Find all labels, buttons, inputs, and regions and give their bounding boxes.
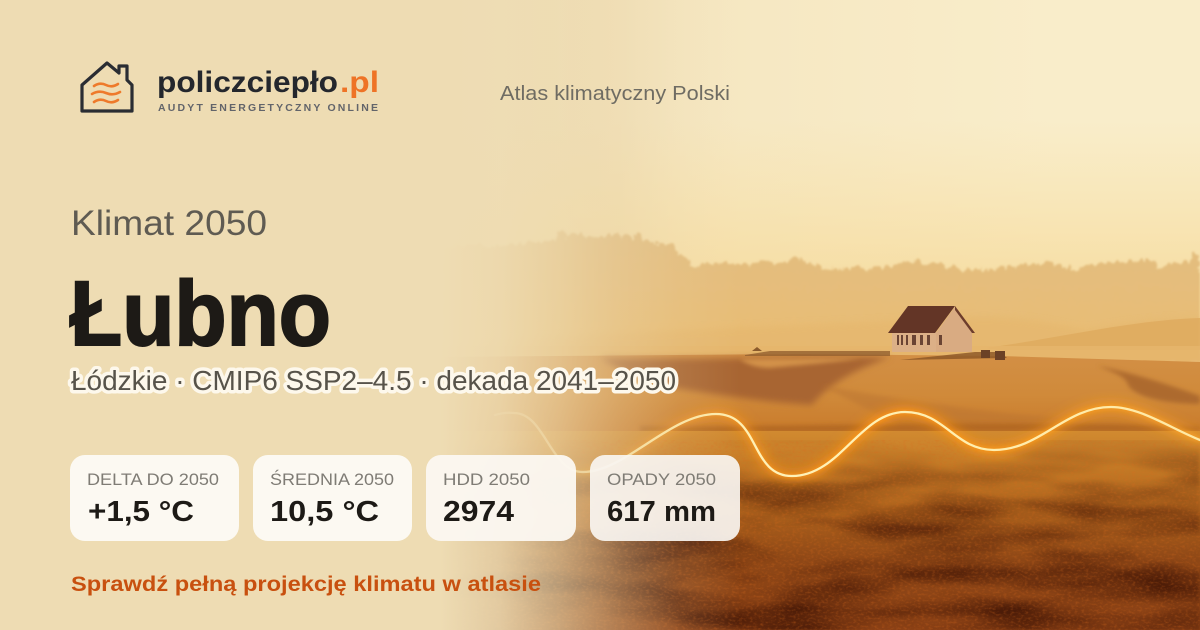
icon: house with heat waves <box>82 63 132 111</box>
stat card: mean <box>253 455 412 541</box>
wheat field <box>440 431 1200 630</box>
glowing climate wave <box>495 407 1200 476</box>
subtitle: Łódzkie · CMIP6 SSP2–4.5 · dekada 2041–2050 <box>71 365 676 396</box>
stat card: precipitation <box>590 455 740 541</box>
stat card: mean: 10,5 °C <box>270 496 379 528</box>
stat card: delta: DELTA DO 2050 <box>87 471 219 489</box>
rolling dune <box>440 354 1200 440</box>
stat card: precipitation: OPADY 2050 <box>607 471 716 489</box>
brand domain: .pl <box>340 66 379 99</box>
subtitle: Łódzkie · CMIP6 SSP2–4.5 · dekada 2041–2050 <box>71 365 676 396</box>
header tagline: Atlas klimatyczny Polski <box>500 82 730 105</box>
stat card: delta <box>70 455 239 541</box>
stat card: mean: ŚREDNIA 2050 <box>270 470 394 489</box>
stat card: HDD <box>426 455 576 541</box>
eyebrow: Klimat 2050 <box>71 204 267 243</box>
dune shadows <box>600 357 890 405</box>
stat card: precipitation: 617 mm <box>607 496 716 528</box>
background scene: countryside at sunset <box>464 0 1200 630</box>
stat card: HDD: HDD 2050 <box>443 471 530 489</box>
title: Łubno <box>70 263 331 365</box>
stat card: HDD: 2974 <box>443 496 514 528</box>
forest silhouette <box>440 232 1200 360</box>
house <box>745 306 1007 360</box>
brand name: policzciepło <box>157 66 338 99</box>
brand tagline: AUDYT ENERGETYCZNY ONLINE <box>158 102 378 114</box>
distant hills <box>450 317 1200 365</box>
logo <box>82 63 379 114</box>
stat card: delta: +1,5 °C <box>88 496 194 528</box>
call to action: Sprawdź pełną projekcję klimatu w atlasie <box>71 572 541 596</box>
